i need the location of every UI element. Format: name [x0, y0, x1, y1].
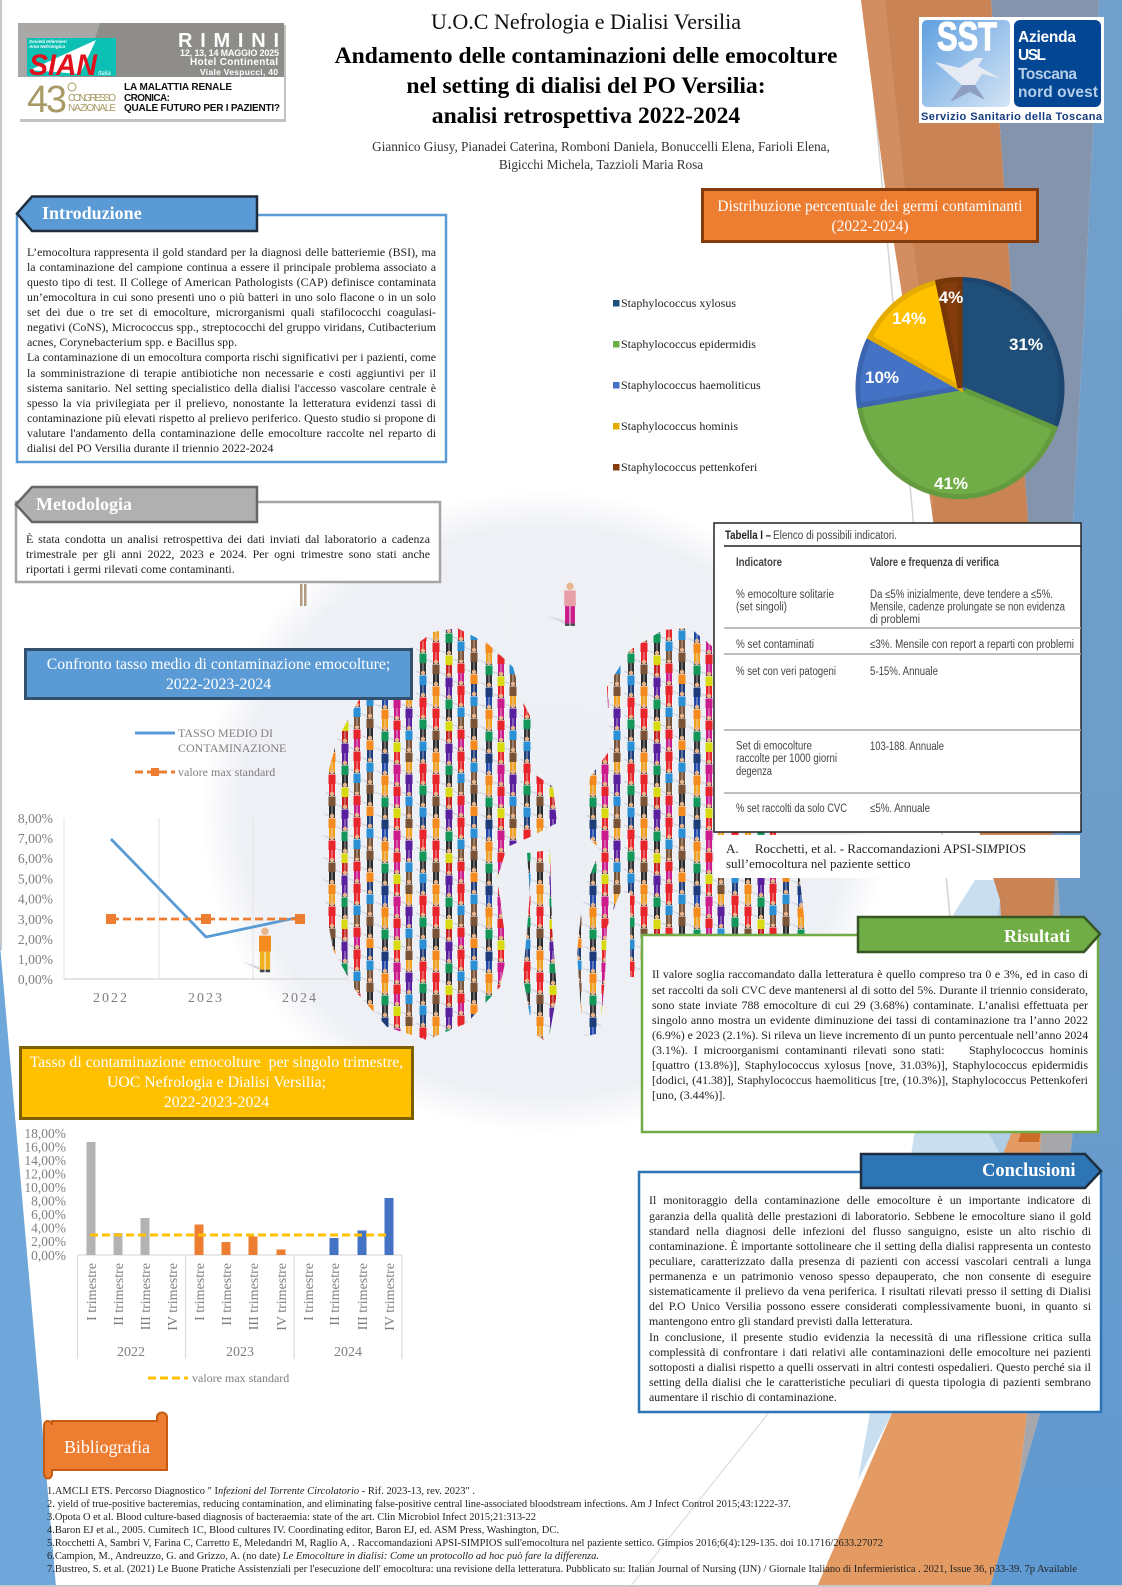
- logo: SST Azienda USL Toscana nord ovest: USL: [1018, 47, 1046, 64]
- logo: SIAN congress banner: Viale Vespucci, 40: [200, 67, 278, 77]
- table caption: [714, 835, 1080, 878]
- results text: sono state inviate 788 emocolture di cui 29 (3.68%) contaminate. L’analisi effettuata per: [652, 998, 1088, 1012]
- year labels: 2023: [226, 1345, 254, 1360]
- panel: risultati: [640, 916, 1102, 1134]
- legend: Staphylococcus xylosus: [621, 296, 736, 310]
- conclusions text: sottoposti a dialisi rispetto a quelli osservati in altri contesti ospedalieri. Questo perché sia il: [649, 1360, 1091, 1374]
- trimester labels: I trimestre: [302, 1263, 317, 1321]
- trimester labels: IV trimestre: [166, 1263, 181, 1331]
- results text: [quattro (13.8%)], Staphylococcus xylosus [nove, 31.03%)], Staphylococcus epidermidis: [652, 1058, 1088, 1072]
- poster title: nel setting di dialisi del PO Versilia:: [406, 73, 766, 99]
- y axis labels: 6,00%: [18, 851, 53, 866]
- authors: Giannico Giusy, Pianadei Caterina, Romboni Daniela, Bonuccelli Elena, Farioli Elena,: [372, 139, 830, 154]
- legend: [613, 296, 761, 474]
- panel: introduzione: [15, 195, 448, 464]
- introduction text: spesso la via privilegiata per il prelievo, nonostante la letteratura evidenzi tassi di: [27, 396, 436, 410]
- trimester labels: [85, 1263, 398, 1331]
- authors: [372, 139, 830, 172]
- logo: SST Azienda USL Toscana nord ovest: nord ovest: [1018, 84, 1098, 101]
- table caption: sull’emocoltura nel paziente settico: [726, 856, 910, 871]
- table: elenco indicatori: % emocolture solitarie: [736, 589, 834, 601]
- table: elenco indicatori: Da ≤5% inizialmente, deve tendere a ≤5%.: [870, 589, 1053, 601]
- pie value labels: 14%: [892, 309, 926, 328]
- x axis labels: 2023: [188, 991, 224, 1006]
- heading: bibliografia scroll: [42, 1412, 168, 1480]
- table: elenco indicatori: degenza: [736, 766, 772, 778]
- panel frame and heading arrow: [15, 195, 448, 464]
- trimester labels: II trimestre: [328, 1263, 343, 1326]
- poster title: [334, 43, 837, 129]
- y axis labels: 1,00%: [18, 952, 53, 967]
- y axis labels: 18,00%: [24, 1126, 66, 1141]
- conclusions text: contaminazione. È importante sottolineare che il setting della dialisi rappresenta un contesto: [649, 1239, 1091, 1253]
- methodology text: riportati i germi rilevati come contaminanti.: [26, 562, 235, 576]
- panel frame and heading arrow: Conclusioni: [982, 1161, 1076, 1181]
- references list: 4.Baron EJ et al., 2005. Cumitech 1C, Blood cultures IV. Coordinating editor, Baron EJ, ed. ASM Press, Washington, DC.: [47, 1524, 559, 1536]
- conclusions text: aumentare il rischio di contaminazione.: [649, 1390, 837, 1404]
- references list: 5.Rocchetti A, Sambri V, Farina C, Carretto E, Meledandri M, Raglio A, . Raccomandazioni APSI-SIMPIOS sull'emocoltura nel paziente settico. Gimpios 2016;6(4):129-135. doi 10.1716/2633.27072: [47, 1537, 883, 1549]
- poster title: analisi retrospettiva 2022-2024: [432, 103, 740, 129]
- results text: [dodici, (41.38)], Staphylococcus haemoliticus [tre, (10.3%)], Staphylococcus Pettenkoferi: [652, 1073, 1088, 1087]
- table: elenco indicatori: Tabella I –: [725, 530, 771, 542]
- panel frame and heading arrow: Metodologia: [36, 494, 132, 514]
- line chart legend: valore max standard: [178, 765, 275, 779]
- heading: tasso per trimestre: [19, 1046, 414, 1120]
- table: elenco indicatori: (set singoli): [736, 602, 787, 614]
- y axis labels: 2,00%: [18, 932, 53, 947]
- trimester labels: II trimestre: [220, 1263, 235, 1326]
- logo: SST Azienda USL Toscana nord ovest: Servizio Sanitario della Toscana: [921, 111, 1103, 123]
- logo: SIAN congress banner: SIAN: [29, 49, 98, 82]
- heading: confronto tasso medio: 2022-2023-2024: [166, 676, 271, 693]
- table: elenco indicatori: ≤5%. Annuale: [870, 803, 930, 815]
- year labels: 2022: [117, 1345, 145, 1360]
- trimester labels: III trimestre: [139, 1263, 154, 1330]
- results text: singolo anno mostra un evidente diminuzione dei tassi di contaminazione tra l’anno 2022: [652, 1013, 1088, 1027]
- methodology text: trimestrale per gli anni 2022, 2023 e 2024. Per ogni trimestre sono stati anche: [26, 547, 430, 561]
- introduction text: la somministrazione di terapie antibiotiche non necessarie e costi aggiuntivi per il: [27, 366, 436, 380]
- legend: Staphylococcus pettenkoferi: [621, 460, 758, 474]
- pie value labels: [865, 288, 1043, 493]
- references list: 3.Opota O et al. Blood culture-based diagnosis of bacteraemia: state of the art. Clin Microbiol Infect 2015;21:313-22: [47, 1511, 536, 1523]
- results text: (3.1%). I microorganismi contaminanti rilevati sono stati: Staphylococcus hominis: [652, 1043, 1088, 1057]
- heading: confronto tasso medio: Confronto tasso medio di contaminazione emocolture;: [47, 656, 390, 673]
- series: tasso medio: [111, 839, 300, 937]
- references list: 2. yield of true-positive bacteremias, reducing contamination, and eliminating false-positive central line-associated bloodstream infections. Am J Infect Control 2015;43:1222-37.: [47, 1498, 791, 1510]
- table: elenco indicatori: [713, 522, 1082, 833]
- heading: distribuzione percentuale: [701, 188, 1039, 243]
- conclusions text: del P.O Unico Versilia possono essere considerati complessivamente buoni, in quanto si: [649, 1299, 1091, 1313]
- trimester labels: IV trimestre: [275, 1263, 290, 1331]
- table: elenco indicatori: % set contaminati: [736, 639, 814, 651]
- y axis labels: 0,00%: [31, 1248, 66, 1263]
- conclusions text: permanenza e un patrimonio venoso spesso depauperato, che non consente di eseguire: [649, 1269, 1091, 1283]
- series: valore max standard: [106, 914, 305, 924]
- references list: [47, 1485, 1077, 1575]
- heading: bibliografia scroll: Bibliografia: [64, 1437, 150, 1457]
- conclusions text: complessità di confrontare i dati relativi alle contaminazioni delle emocolture nei pazienti: [649, 1345, 1091, 1359]
- introduction text: dialisi del PO Versilia durante il triennio 2022-2024: [27, 441, 273, 455]
- table: elenco indicatori: 103-188. Annuale: [870, 741, 944, 753]
- table: elenco indicatori: Elenco di possibili indicatori.: [773, 530, 897, 542]
- table: elenco indicatori: di problemi: [870, 614, 920, 626]
- introduction text: L’emocoltura rappresenta il gold standard per la diagnosi delle batteriemie (BSI), ma: [27, 244, 436, 258]
- methodology text: È stata condotta un analisi retrospettiva dei dati inviati dal laboratorio a cadenza: [26, 532, 430, 546]
- heading: tasso per trimestre: Tasso di contaminazione emocolture per singolo trimestre,: [30, 1054, 403, 1071]
- logo: SIAN congress banner: CONGRESSO: [68, 93, 116, 104]
- results text: set raccolti da soli CVC deve mantenersi al di sotto del 5%. Durante il triennio considerato,: [652, 983, 1088, 997]
- trimester labels: III trimestre: [356, 1263, 371, 1330]
- y axis labels: 0,00%: [18, 972, 53, 987]
- conclusions text: peculiare, caratterizzato dalla presenza di pazienti con accessi vascolari centrali a lunga: [649, 1254, 1091, 1268]
- introduction text: un’emocoltura in cui sono presenti uno o più batteri in uno solo flacone o in un solo: [27, 290, 436, 304]
- header title block: [334, 9, 837, 172]
- y axis labels: 7,00%: [18, 831, 53, 846]
- introduction text: questo tipo di test. Il College of American Pathologists (CAP) definisce contaminata: [27, 275, 436, 289]
- pie chart: distribuzione germi contaminanti: [613, 277, 1064, 500]
- trimester labels: III trimestre: [247, 1263, 262, 1330]
- heading: distribuzione percentuale: (2022-2024): [832, 218, 908, 234]
- introduction text: negativi (CoNS), Micrococcus spp., streptococchi del gruppo viridans, Cutibacterium: [27, 320, 436, 334]
- introduction text: valutare l'andamento della contaminazione delle emocolture raccolte nel reparto di: [27, 426, 436, 440]
- references list: 1.AMCLI ETS. Percorso Diagnostico " Infezioni del Torrente Circolatorio - Rif. 2023-13, rev. 2023" .: [47, 1485, 475, 1497]
- table: elenco indicatori: raccolte per 1000 giorni: [736, 753, 837, 765]
- logo: SIAN congress banner: RIMINI: [178, 30, 279, 52]
- results text: (6.9%) e 2023 (2.1%). Si rileva un lieve incremento di un punto percentuale nell’anno 2024: [652, 1028, 1088, 1042]
- conclusions text: setting della dialisi che le caratteristiche peculiari di questa tipologia di pazienti sembrano: [649, 1375, 1091, 1389]
- logo: SIAN congress banner: QUALE FUTURO PER I PAZIENTI?: [124, 103, 280, 114]
- introduction text: la contaminazione del campione continua a essere il principale problema associato a: [27, 260, 436, 274]
- table: elenco indicatori: Valore e frequenza di verifica: [870, 557, 999, 569]
- logo: SIAN congress banner: Hotel Continental: [190, 57, 278, 68]
- table: elenco indicatori: 5-15%. Annuale: [870, 666, 938, 678]
- panel: metodologia: [14, 486, 442, 584]
- pie value labels: 31%: [1009, 335, 1043, 354]
- y axis labels: 6,00%: [31, 1207, 66, 1222]
- y axis labels: 5,00%: [18, 872, 53, 886]
- pie value labels: 10%: [865, 368, 899, 387]
- conclusions text: [649, 1193, 1091, 1404]
- y axis labels: [18, 811, 53, 987]
- y axis labels: 4,00%: [31, 1220, 66, 1236]
- heading: confronto tasso medio: [24, 648, 413, 700]
- bars 2023: [194, 1224, 286, 1255]
- table: elenco indicatori: % set raccolti da solo CVC: [736, 803, 847, 815]
- x axis labels: 2024: [282, 991, 318, 1006]
- bars 2024: [330, 1198, 394, 1255]
- logo: SIAN congress banner: Italia: [98, 71, 111, 77]
- table: elenco indicatori: % set con veri patogeni: [736, 666, 836, 678]
- results text: [652, 967, 1088, 1102]
- introduction text: acnes, Corynebacterium spp. e Bacillus spp.: [27, 335, 237, 349]
- panel frame and heading arrow: [638, 1152, 1103, 1414]
- panel frame and heading arrow: Introduzione: [42, 203, 142, 223]
- legend: Staphylococcus hominis: [621, 419, 738, 433]
- logo: SIAN congress banner: 12, 13, 14 MAGGIO 2025: [180, 48, 279, 58]
- y axis labels: 12,00%: [24, 1166, 66, 1182]
- introduction text: [27, 244, 436, 455]
- logo: SIAN congress banner: LA MALATTIA RENALE: [124, 82, 232, 93]
- panel frame and heading arrow: [640, 916, 1102, 1134]
- line chart: tasso medio di contaminazione: [18, 726, 348, 1006]
- introduction text: contaminazione più elevati rispetto al prelievo periferico. Questo studio si propone di: [27, 411, 436, 425]
- logo: SST Azienda USL Toscana nord ovest: Azienda: [1018, 29, 1076, 46]
- pie value labels: 41%: [934, 474, 968, 493]
- panel frame and heading arrow: [14, 486, 442, 584]
- legend: Staphylococcus epidermidis: [621, 337, 756, 351]
- year labels: 2024: [334, 1345, 362, 1360]
- department name: U.O.C Nefrologia e Dialisi Versilia: [431, 9, 741, 34]
- panel frame and heading arrow: Risultati: [1004, 926, 1070, 946]
- y axis labels: 2,00%: [31, 1234, 66, 1249]
- table: elenco indicatori: Set di emocolture: [736, 740, 812, 752]
- heading: tasso per trimestre: UOC Nefrologia e Dialisi Versilia;: [107, 1074, 326, 1091]
- bars 2022: [86, 1142, 150, 1255]
- table: elenco indicatori: Indicatore: [736, 557, 782, 569]
- trimester labels: II trimestre: [112, 1263, 127, 1326]
- introduction text: sistema sanitario. Nel setting specialistico della dialisi l'accesso vascolare centrale è: [27, 381, 436, 395]
- x axis labels: 2022: [93, 991, 129, 1006]
- logo: SIAN congress banner: NAZIONALE: [68, 103, 116, 114]
- methodology text: [26, 532, 430, 576]
- threshold line: [90, 1234, 389, 1236]
- y axis labels: 8,00%: [18, 811, 53, 826]
- y axis labels: 4,00%: [18, 892, 53, 906]
- poster title: Andamento delle contaminazioni delle emocolture: [335, 43, 837, 69]
- line chart legend: TASSO MEDIO DI: [178, 726, 273, 740]
- logo: SST Azienda USL Toscana nord ovest: Toscana: [1018, 66, 1077, 83]
- y axis labels: [24, 1126, 66, 1263]
- logo: SIAN congress banner: 43: [27, 79, 67, 121]
- panel: conclusioni: [638, 1152, 1103, 1414]
- results text: Il valore soglia raccomandato dalla letteratura è quello compreso tra 0 e 3%, ed in caso di: [652, 967, 1088, 981]
- y axis labels: 16,00%: [24, 1140, 66, 1154]
- logo: SIAN congress banner: Società Infermieri: [29, 39, 68, 44]
- conclusions text: sistematicamente il prelievo da vena periferica. I risultati rilevati presso il setting di Dialisi: [649, 1284, 1091, 1298]
- y axis labels: 14,00%: [24, 1153, 66, 1168]
- line chart legend: CONTAMINAZIONE: [178, 741, 286, 755]
- introduction text: set dei due o tre set di emocolture, microrganismi quali stafilococchi coagulasi-: [27, 305, 436, 319]
- heading: distribuzione percentuale: Distribuzione percentuale dei germi contaminanti: [717, 198, 1023, 215]
- logo: SST Azienda USL Toscana nord ovest: [919, 17, 1104, 123]
- conclusions text: Il monitoraggio della contaminazione delle emocolture è un importante indicatore di: [649, 1193, 1091, 1207]
- y axis labels: 8,00%: [31, 1194, 66, 1208]
- year labels: [117, 1345, 362, 1360]
- x axis labels: [93, 991, 318, 1006]
- heading: tasso per trimestre: 2022-2023-2024: [164, 1094, 269, 1111]
- bar chart: tasso per trimestre: [24, 1126, 402, 1385]
- references list: 6.Campion, M., Andreuzzo, G. and Grizzo, A. (no date) Le Emocolture in dialisi: Come un protocollo ad hoc può fare la differenza.: [47, 1550, 599, 1562]
- logo: SIAN congress banner: CRONICA:: [124, 93, 170, 104]
- conclusions text: In conclusione, il presente studio evidenzia la necessità di una riflessione critica sulla: [649, 1330, 1091, 1344]
- line chart legend: [135, 726, 286, 779]
- logo: SIAN congress banner: [18, 23, 286, 122]
- legend: Staphylococcus haemoliticus: [621, 378, 761, 392]
- conclusions text: garanzia della qualità delle prestazioni di laboratorio. Sebbene le emocolture siano il gold: [649, 1209, 1091, 1223]
- results text: [uno, (3.44%)].: [652, 1088, 725, 1102]
- trimester labels: IV trimestre: [383, 1263, 398, 1331]
- introduction text: La contaminazione di un emocoltura comporta rischi significativi per i pazienti, come: [27, 350, 436, 364]
- bar chart legend: valore max standard: [192, 1371, 289, 1385]
- conclusions text: standard nella diagnosi delle infezioni del flusso sanguigno, esiste un alto rischio di: [649, 1224, 1091, 1238]
- trimester labels: I trimestre: [85, 1263, 100, 1321]
- logo: SIAN congress banner: Area Nefrologica: [28, 44, 66, 49]
- trimester labels: I trimestre: [193, 1263, 208, 1321]
- y axis labels: 10,00%: [24, 1180, 66, 1195]
- authors: Bigicchi Michela, Tazzioli Maria Rosa: [499, 156, 703, 172]
- table caption: A. Rocchetti, et al. - Raccomandazioni APSI-SIMPIOS: [726, 841, 1026, 856]
- conclusions text: mantengono entro gli standard previsti dalla letteratura.: [649, 1314, 913, 1328]
- pie value labels: 4%: [939, 288, 963, 307]
- y axis labels: 3,00%: [18, 912, 53, 927]
- pie slices: [858, 280, 1062, 497]
